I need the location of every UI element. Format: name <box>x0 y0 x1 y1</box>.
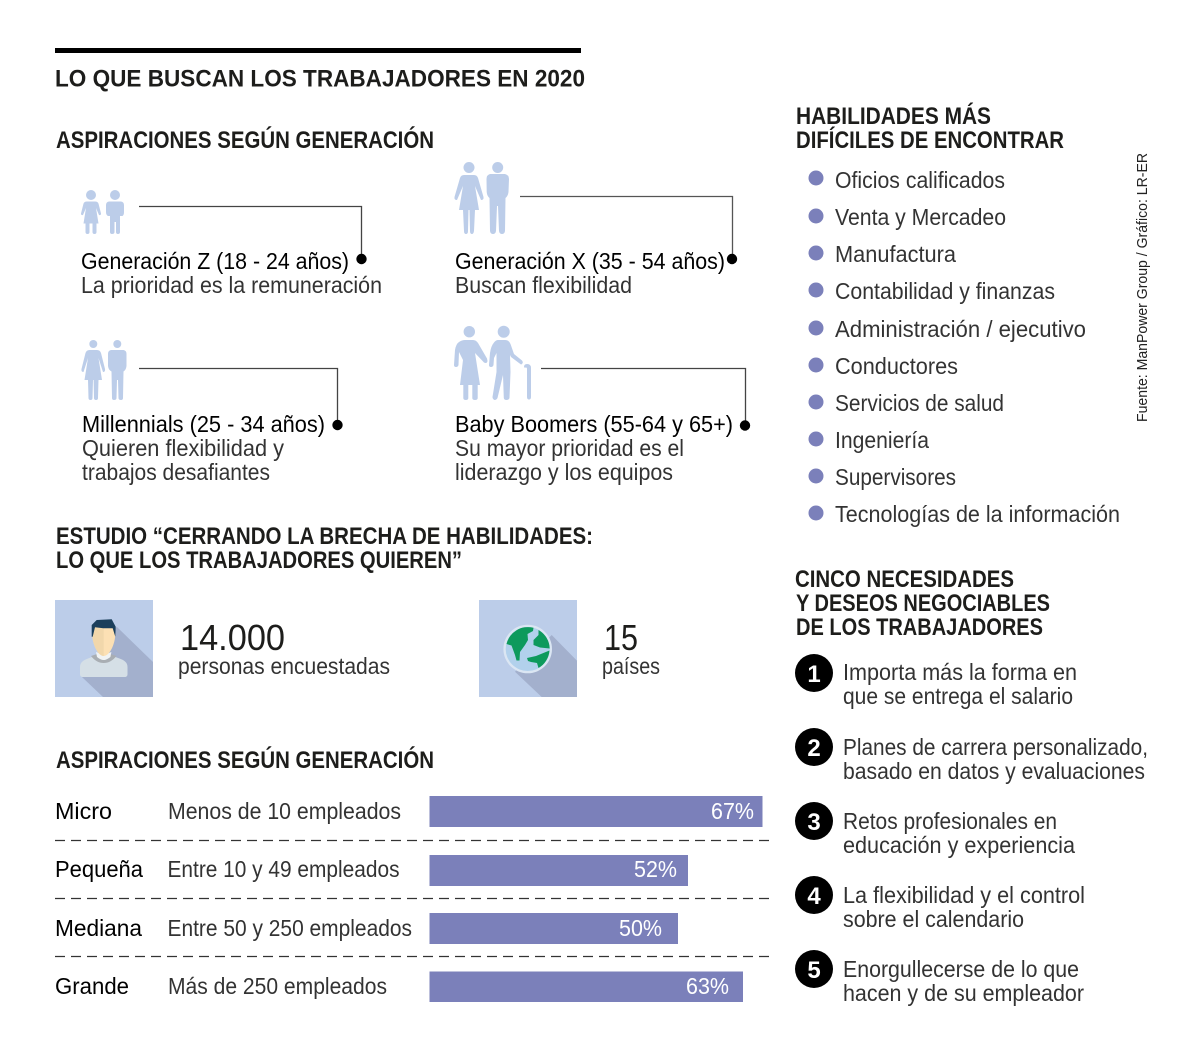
heading: aspiraciones (chart): ASPIRACIONES SEGÚN GENERACIÓN <box>56 746 434 774</box>
panel: Baby Boomers <box>454 326 750 485</box>
item 3 <box>795 802 1075 858</box>
heading: cinco necesidades: DE LOS TRABAJADORES <box>796 614 1043 641</box>
item 1: Importa más la forma en <box>843 659 1077 685</box>
text: Generación Z: La prioridad es la remuneración <box>81 272 382 298</box>
heading: estudio: ESTUDIO “CERRANDO LA BRECHA DE HABILIDADES: <box>56 523 593 550</box>
item 5: hacen y de su empleador <box>843 980 1084 1006</box>
icon: Generación X couple <box>454 162 509 234</box>
row: Mediana <box>55 913 678 944</box>
heading: habilidades <box>796 102 1064 154</box>
row: Micro: Menos de 10 empleados <box>168 798 401 824</box>
item 4: sobre el calendario <box>843 906 1024 932</box>
item 2: 2 <box>807 735 821 762</box>
item 4: La flexibilidad y el control <box>843 882 1085 908</box>
text: Generación X <box>455 248 725 298</box>
stat: 14.000 personas encuestadas: 14.000 <box>180 617 285 658</box>
heading: habilidades: DIFÍCILES DE ENCONTRAR <box>796 126 1064 154</box>
heading: cinco necesidades: Y DESEOS NEGOCIABLES <box>796 590 1050 617</box>
list: habilidades: Tecnologías de la información <box>835 501 1120 527</box>
row: Pequeña <box>55 855 688 886</box>
text: Millennials: Quieren flexibilidad y <box>82 435 284 461</box>
item 3: 3 <box>807 809 821 836</box>
list: habilidades: Conductores <box>835 353 958 379</box>
heading: habilidades: HABILIDADES MÁS <box>796 102 991 130</box>
connector: Generación Z <box>139 206 362 259</box>
text: Generación X: Buscan flexibilidad <box>455 272 632 298</box>
source credit: Fuente: ManPower Group / Gráfico: LR-ER <box>1135 153 1151 422</box>
icon: person <box>55 600 153 697</box>
item 1 <box>795 654 1077 709</box>
title: LO QUE BUSCAN LOS TRABAJADORES EN 2020 <box>55 66 585 92</box>
row: Grande: Más de 250 empleados <box>168 973 387 999</box>
item 1: que se entrega el salario <box>843 683 1073 709</box>
list: habilidades: Supervisores <box>835 464 956 490</box>
top rule <box>55 48 581 53</box>
list: habilidades: Oficios calificados <box>835 167 1005 193</box>
row: Micro: Micro <box>55 798 112 824</box>
list: habilidades: Manufactura <box>835 241 956 267</box>
row: Mediana: Mediana <box>55 915 142 941</box>
row: Pequeña: Entre 10 y 49 empleados <box>168 856 400 882</box>
stat: 15 países <box>602 617 660 679</box>
list: habilidades: Servicios de salud <box>835 390 1004 416</box>
item 5: Enorgullecerse de lo que <box>843 956 1079 982</box>
connector dot <box>332 420 343 430</box>
heading: estudio: LO QUE LOS TRABAJADORES QUIEREN” <box>56 547 462 574</box>
connector: Millennials <box>139 368 338 425</box>
connector dot <box>356 254 367 264</box>
text: Generación Z: Generación Z (18 - 24 años) <box>81 248 349 274</box>
text: Millennials: Millennials (25 - 34 años) <box>82 411 325 437</box>
icon: elderly couple <box>454 326 531 400</box>
heading: aspiraciones según generación: ASPIRACIONES SEGÚN GENERACIÓN <box>56 126 434 154</box>
row: Mediana: 50% <box>619 915 662 941</box>
connector dot <box>727 254 737 264</box>
text: Baby Boomers: Baby Boomers (55-64 y 65+) <box>455 411 733 437</box>
connector: Generación X <box>520 196 732 259</box>
text: Generación X: Generación X (35 - 54 años) <box>455 248 725 274</box>
text: Baby Boomers: liderazgo y los equipos <box>455 459 673 485</box>
item 5: 5 <box>807 957 821 984</box>
list: habilidades: Contabilidad y finanzas <box>835 278 1055 304</box>
item 2 <box>795 728 1148 784</box>
text: Generación Z <box>81 248 382 298</box>
row: Grande <box>55 972 743 1002</box>
heading: cinco necesidades: CINCO NECESIDADES <box>795 566 1014 593</box>
item 4: 4 <box>807 883 821 910</box>
text: Baby Boomers <box>455 411 733 485</box>
stat: 15 países: países <box>602 653 660 679</box>
item 3: educación y experiencia <box>843 832 1075 858</box>
panel: Generación Z <box>81 190 382 298</box>
list: habilidades: Administración / ejecutivo <box>835 316 1086 342</box>
icon: Millennials couple <box>81 340 126 400</box>
stat: 14.000 personas encuestadas: personas encuestadas <box>178 653 390 679</box>
row: Micro <box>55 796 762 827</box>
item 5 <box>795 950 1084 1006</box>
connector: Baby Boomers <box>541 368 746 425</box>
text: Baby Boomers: Su mayor prioridad es el <box>455 435 684 461</box>
row: Pequeña: 52% <box>634 856 677 882</box>
row: Pequeña: Pequeña <box>55 856 143 882</box>
list: habilidades: Venta y Mercadeo <box>835 204 1006 230</box>
icon: Generación Z couple <box>81 190 124 234</box>
item 2: Planes de carrera personalizado, <box>843 734 1148 760</box>
heading: cinco necesidades <box>795 566 1050 641</box>
bar chart <box>55 796 773 1002</box>
text: Millennials <box>82 411 325 485</box>
row: Grande: 63% <box>686 973 729 999</box>
icon: globe <box>479 600 577 697</box>
item 3: Retos profesionales en <box>843 808 1057 834</box>
row: Mediana: Entre 50 y 250 empleados <box>168 915 412 941</box>
panel: Millennials <box>81 340 343 485</box>
item 4 <box>795 876 1085 932</box>
stat: 15 países: 15 <box>604 617 638 658</box>
list: habilidades: Ingeniería <box>835 427 929 453</box>
stat: 14.000 personas encuestadas <box>178 617 390 679</box>
row: Grande: Grande <box>55 973 129 999</box>
connector dot <box>740 420 750 431</box>
item 2: basado en datos y evaluaciones <box>843 758 1145 784</box>
item 1: 1 <box>807 661 821 688</box>
list: habilidades <box>808 167 1120 527</box>
row: Micro: 67% <box>711 798 754 824</box>
text: Millennials: trabajos desafiantes <box>82 459 270 485</box>
panel: Generación X <box>454 162 737 298</box>
heading: estudio <box>56 523 593 574</box>
